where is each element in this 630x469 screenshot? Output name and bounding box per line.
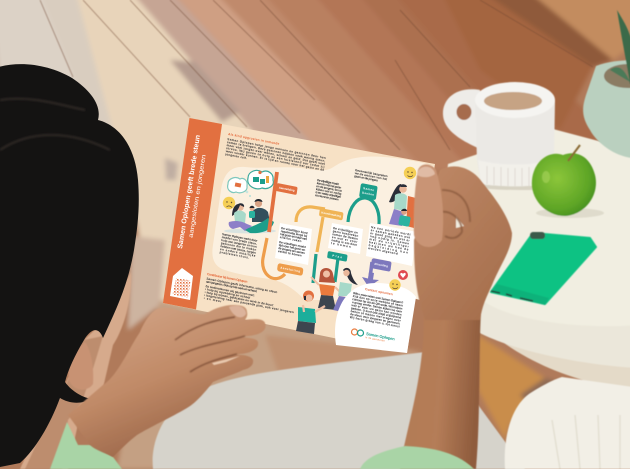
coffee: [484, 92, 542, 110]
finger creases: [440, 190, 470, 238]
contact text: gedaan. U kunt ook altijd vrijblijvend: [351, 306, 402, 320]
table shadow band: [470, 320, 630, 392]
sign: Aanmelding: [276, 183, 298, 195]
family text block: problemen thuis.: [219, 250, 250, 260]
finger gap: [212, 356, 240, 365]
intro text block: stress. Wij geven ze hulp en een luisterend oor zodat zij: [226, 146, 325, 169]
cup shadow: [476, 182, 564, 190]
sign: Aansluiting: [277, 263, 304, 276]
contact heading: Contact opnemen: [365, 287, 393, 296]
white box: step text middle: te komen: [331, 241, 351, 249]
contact text: de steun voor jongeren en gezinnen.: [350, 312, 401, 326]
child: [401, 209, 407, 215]
family text block: middel van brede steun,: [221, 235, 258, 246]
green phone: [491, 232, 596, 305]
illustration: mother and child with happy face: [389, 167, 416, 228]
table pedestal: [505, 377, 630, 469]
logo: Samen Oplopen: [352, 329, 396, 343]
contact text: wat er voor uw gezin kan worden: [350, 303, 402, 317]
teal path: [313, 198, 379, 283]
white box: step text middle: samen de doelen: [332, 232, 358, 241]
white box: step text middle: De vrijwilliger en: [333, 226, 358, 235]
contact text: u graag verder. Samen kijken we naar: [352, 300, 403, 314]
cup body: [475, 100, 555, 186]
white box: step text right: Na een periode wordt: [371, 225, 411, 237]
sign: Plan: Plan: [332, 253, 343, 259]
intro text block: jongeren zelf.: [224, 152, 247, 160]
bottom-left text block: • hulp bij wonen, geldzaken en werk in de buurt: [204, 290, 274, 307]
white contact panel: [335, 283, 416, 353]
contact text: Wij horen graag van u, tot ziens!: [350, 315, 400, 329]
right shirt cuff: [360, 446, 474, 469]
white box: step text left: allerlei zaken: [280, 235, 302, 243]
icon: house with QR code: [170, 268, 193, 300]
wood plank seams: [40, 0, 593, 150]
white box: step text middle: gezin bespreken: [332, 229, 359, 238]
sign: Samen denken: Samen: [363, 186, 375, 192]
white box: step text right: [366, 223, 417, 266]
hand and wrist: [68, 305, 266, 457]
pedestal ribs: [552, 415, 620, 469]
hair highlights: [0, 99, 110, 150]
bottom-left text block: Contribueer bij Samen Oplopen: [207, 272, 248, 284]
handle hole: [456, 104, 472, 120]
icon: heart badge: [398, 270, 408, 280]
sign: Aanmelding: Aanmelding: [279, 185, 295, 193]
family text block: Samen Oplopen werkt door: [222, 232, 259, 243]
white box: step text left: de jongere om samen: [278, 246, 305, 255]
orange title band: [163, 118, 222, 310]
white box: step text left: De vrijwilliger maakt: [279, 240, 306, 249]
floating text: step 2: Gezamenlijk bespreken: [355, 168, 388, 178]
left hand holding flyer: [68, 305, 266, 457]
orange path pole: [269, 172, 277, 232]
contact text: bellen of mailen met vragen over: [350, 309, 402, 323]
thumb nail: [417, 167, 435, 177]
white box: step text right: begeleiding kan: [368, 243, 408, 255]
family text block: hulp aan jongeren en hun: [221, 238, 257, 249]
icon: worry thought clouds: [228, 170, 273, 197]
white box: step text right: met de vrijwilliger: [369, 237, 410, 249]
bottom-left text block: Zo ondersteunen wij gezinnen met:: [205, 284, 255, 297]
white box: step text right: bekijken we hoe de: [369, 240, 409, 252]
leaves: [617, 10, 630, 84]
white box: step text right: worden afgerond: [367, 246, 398, 256]
thumb: [414, 164, 443, 247]
coffee cup: [443, 82, 564, 190]
illustration: woman on the phone: [296, 290, 325, 334]
contact text: Kijk dan op onze website of neem: [352, 294, 403, 308]
icon: purple down arrow: [362, 272, 379, 287]
family text block: hebben met stress, zorgen: [220, 244, 256, 255]
forearm: [400, 300, 482, 469]
fingers and palm: [414, 166, 512, 320]
purple path: [370, 262, 372, 278]
cup handle: [443, 89, 480, 148]
intro text block: samen te brengen. Deze gezinnen hebben vaak weinig steun,: [227, 140, 326, 163]
finger creases: [175, 317, 245, 372]
icon: smiley: [389, 279, 401, 291]
light background blob: [212, 157, 434, 300]
sign: Samen denken: [359, 183, 378, 200]
white box: step text left: tijd voor het gezin en: [278, 243, 306, 252]
finger gap: [456, 216, 464, 228]
contact text: [349, 291, 404, 329]
illustration: family on the floor: [224, 199, 276, 234]
green apple: [532, 145, 604, 218]
sign: Afronding: Afronding: [374, 262, 389, 268]
grey chair cushion: [153, 352, 525, 469]
cup rim: [475, 82, 555, 118]
family text block: en andere moeilijke: [220, 247, 256, 258]
white box: step text right: er samen gekeken wat: [370, 228, 410, 240]
white box: step text middle: [328, 223, 363, 254]
cup ribbed base: [478, 160, 553, 186]
intro text block: Als kind opgroeien in armoede: [228, 132, 280, 146]
light orange curved path: [263, 238, 285, 279]
floating text: step 1: zou kunnen passen: [315, 193, 339, 202]
white box: step text middle: nodig is om daar: [331, 238, 358, 247]
floating text: step 1: kijken wat er nodig: [316, 187, 342, 196]
white box: step text middle: en wat er voor: [332, 235, 359, 244]
plant pot: [583, 10, 630, 158]
sign: Kennismaking: Kennismaking: [321, 210, 342, 218]
white box: step text left: De vrijwilliger komt: [281, 226, 308, 235]
flyer sheet: [163, 118, 435, 353]
white box: step text left: verder te komen: [278, 249, 302, 258]
logo: Samen Oplopen: in de gemeente: [365, 336, 386, 343]
flyer title: Samen Oplopen geeft brede steun: [177, 134, 202, 249]
mother: [389, 184, 401, 202]
contact text: Wilt u meer weten over Samen Oplopen?: [353, 291, 404, 305]
intro text block: Samen Oplopen helpt jonge mensen en gezinnen door hen: [227, 137, 326, 160]
bottom-left text block: • en meer: [204, 296, 223, 304]
floating text: step 2: gezin en de jongere: [354, 174, 378, 183]
white box: step text left: [275, 223, 312, 265]
bottom-left text block: Samen Oplopen geeft informatie, uitleg en steun: [206, 277, 278, 294]
right hand and forearm: [400, 164, 512, 469]
left shirt collar: [50, 422, 122, 469]
intro text block: [224, 132, 327, 175]
orange figure: [406, 196, 416, 228]
bottom-left text block: • begeleiding naar een passende plek, ook voor jongeren: [204, 293, 294, 314]
phone camera: [530, 232, 545, 239]
yellow arch path: [296, 207, 325, 252]
floating text: step 2: we de wensen van het: [353, 171, 387, 181]
floating text: step 2: [353, 168, 388, 184]
intro text block: maar veel zorgen over wonen, school en geld. Dat geeft veel: [226, 143, 325, 166]
bottom-left text block: [204, 272, 297, 317]
white box: step text right: er goed ging en wat er: [370, 231, 411, 243]
white box: step text left: regelmatig langs bij: [280, 229, 308, 238]
sign: Aansluiting: Aansluiting: [280, 266, 301, 273]
contact text: contact op via de QR-code. Wij helpen: [352, 297, 403, 311]
logo: Samen Oplopen: Samen Oplopen: [366, 331, 396, 342]
floating text: step 1: De vrijwilliger maakt: [317, 178, 339, 186]
bottom-left text block: aan jongeren. Ook op het werk en school.: [206, 280, 258, 293]
icon: sad face: [223, 197, 235, 209]
sign: Samen denken: Denken: [362, 190, 375, 197]
sign: Afronding: [371, 258, 392, 272]
man's black hair: [0, 64, 139, 468]
floating text: step 1: en de jongere, om te: [316, 184, 342, 193]
family text block: gezinnen die te maken: [221, 241, 257, 252]
floating text: step 1: [315, 178, 344, 202]
thumb nail: [229, 306, 246, 317]
illustration: woman in mint top: [333, 268, 358, 311]
floating text: step 1: is en welke vrijwilliger: [315, 190, 342, 199]
man's neck and face: [20, 272, 131, 469]
sign: Kennismaking: [319, 208, 344, 221]
table rim: [470, 290, 630, 368]
pot body: [583, 60, 630, 158]
white box: step text left: het gezin en helpt met: [280, 232, 307, 241]
floating text: step 1: kennis met het gezin: [316, 181, 342, 190]
ear: [68, 342, 93, 390]
apple stem: [568, 145, 580, 161]
bottom-left text block: • hulp bij opvoeding en school: [205, 287, 251, 300]
white box: step text right: nog nodig is. Samen: [370, 234, 410, 246]
flyer title: aangesloten en jongeren: [188, 153, 208, 238]
flyer: [163, 118, 435, 353]
soil: [604, 64, 630, 88]
white side table: [440, 129, 630, 469]
happy face: [404, 167, 416, 179]
illustration: woman in orange top: [311, 268, 342, 310]
phone ports: [491, 291, 533, 301]
sign: Plan: [327, 251, 348, 262]
table top: [440, 129, 630, 326]
intro text block: weer verder kunnen. Er is tijd en ruimte voor het gezin en de: [225, 149, 325, 172]
family text block: [219, 232, 259, 261]
